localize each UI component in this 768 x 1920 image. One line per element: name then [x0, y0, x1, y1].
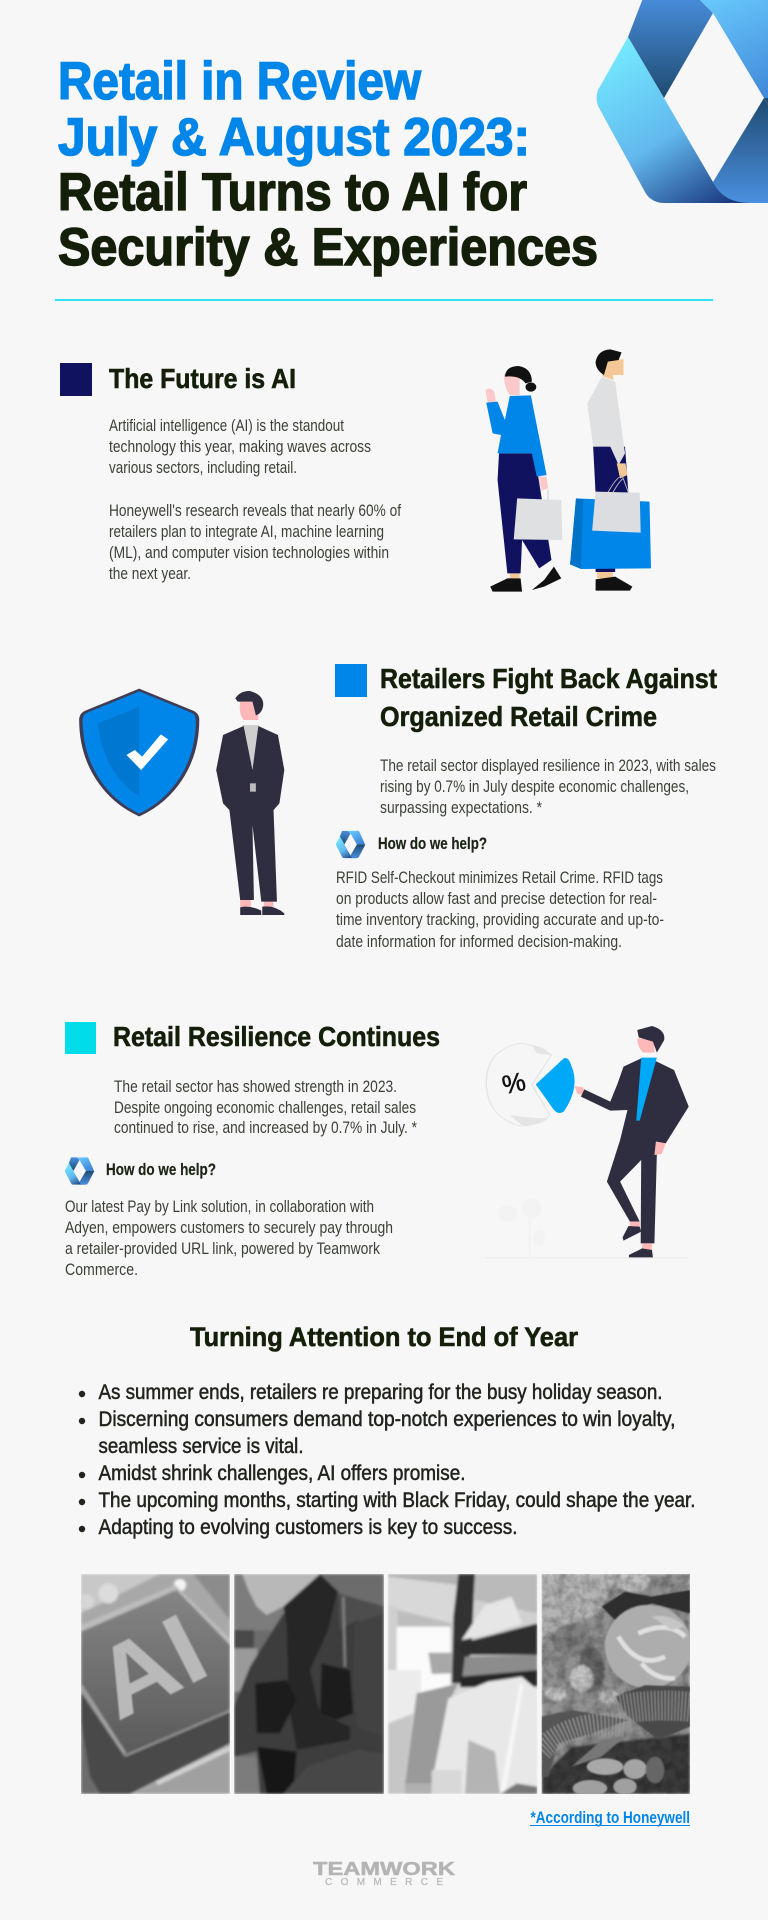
illustration: shield and man [81, 690, 284, 915]
text block: RFID: time inventory tracking, providing accurate and up-to- [336, 911, 664, 929]
heading: The Future is AI: The Future is AI [109, 363, 296, 394]
photo: AI chip [77, 1574, 230, 1794]
illustration: man with percent pie [485, 1026, 689, 1259]
panel: Retailers Fight Back [81, 663, 717, 951]
footer logo: Teamwork Commerce: TEAMWORK [313, 1858, 456, 1879]
subheading: how do we help: How do we help? [106, 1161, 216, 1179]
icon: navy square [60, 363, 92, 396]
text block: AI intro: (ML), and computer vision technologies within [109, 544, 389, 562]
text block: AI intro: technology this year, making waves across [109, 438, 371, 456]
text block: resilience: surpassing expectations. * [380, 799, 542, 817]
panel: Retail Resilience Continues [65, 1021, 689, 1279]
heading: Turning Attention: Turning Attention to End of Year [190, 1322, 578, 1352]
illustration: two shoppers [485, 349, 651, 592]
text block: resilience: rising by 0.7% in July despite economic challenges, [380, 778, 689, 796]
bullet list [79, 1381, 696, 1539]
text block: strength [114, 1078, 417, 1137]
bullet list: Discerning consumers demand top-notch experiences to win loyalty, [98, 1408, 676, 1431]
text block: resilience [380, 757, 716, 817]
title [58, 52, 598, 277]
icon: blue square [335, 664, 367, 697]
heading: Retail Resilience Continues: Retail Resilience Continues [113, 1021, 440, 1052]
text block: strength: The retail sector has showed strength in 2023. [114, 1078, 397, 1096]
logo: brand mark top right [596, 0, 768, 203]
bullet list: Amidst shrink challenges, AI offers promise. [98, 1462, 466, 1485]
photo strip [77, 1572, 692, 1797]
subheading: how do we help: How do we help? [378, 835, 487, 853]
panel: The Future is AI [60, 349, 651, 592]
title: Retail Turns to AI for [58, 163, 527, 222]
panel: Turning Attention to End of Year [79, 1322, 696, 1539]
icon: small brand mark [336, 831, 365, 858]
photo: christmas ornament [542, 1572, 692, 1797]
title: Security & Experiences [58, 218, 598, 277]
text block: pay by link: a retailer-provided URL link, powered by Teamwork [65, 1240, 381, 1258]
heading: Retailers Fight Back [380, 663, 717, 732]
text block: AI intro [109, 417, 401, 583]
text block: RFID: date information for informed decision-making. [336, 933, 622, 951]
heading: Retailers Fight Back: Retailers Fight Back Against [380, 663, 717, 694]
text block: strength: Despite ongoing economic challenges, retail sales [114, 1099, 416, 1117]
icon: cyan square [65, 1022, 96, 1054]
text block: AI intro: various sectors, including retail. [109, 459, 297, 477]
photo: clothing store [388, 1574, 537, 1794]
text block: AI intro: Honeywell's research reveals that nearly 60% of [109, 502, 401, 520]
text block: RFID: on products allow fast and precise detection for real- [336, 890, 657, 908]
text block: AI intro: retailers plan to integrate AI, machine learning [109, 523, 384, 541]
text block: AI intro: the next year. [109, 565, 191, 583]
bullet list: The upcoming months, starting with Black Friday, could shape the year. [98, 1489, 696, 1512]
title: July & August 2023: [58, 108, 530, 167]
text block: pay by link [65, 1198, 393, 1279]
footer logo: Teamwork Commerce: COMMERCE [325, 1877, 443, 1888]
citation link: *According to Honeywell [530, 1809, 690, 1827]
text block: pay by link: Commerce. [65, 1261, 138, 1279]
footer logo: Teamwork Commerce [313, 1858, 456, 1888]
text block: RFID: RFID Self-Checkout minimizes Retail Crime. RFID tags [336, 869, 663, 887]
texture noise [542, 1574, 690, 1794]
bullet list: As summer ends, retailers re preparing for the busy holiday season. [98, 1381, 662, 1404]
text block: strength: continued to rise, and increased by 0.7% in July. * [114, 1119, 417, 1137]
photo: security guard [234, 1574, 384, 1794]
icon: shield [81, 690, 198, 815]
text block: RFID [336, 869, 664, 951]
heading: Retailers Fight Back: Organized Retail Crime [380, 701, 657, 732]
icon: percent sign: % [499, 1066, 528, 1100]
title: Retail in Review [58, 52, 422, 111]
text block: AI intro: Artificial intelligence (AI) is the standout [109, 417, 344, 435]
icon: small brand mark [65, 1157, 94, 1185]
text block: pay by link: Our latest Pay by Link solution, in collaboration with [65, 1198, 374, 1216]
text block: pay by link: Adyen, empowers customers to securely pay through [65, 1219, 393, 1237]
bullet list: Adapting to evolving customers is key to success. [98, 1516, 518, 1539]
photo: AI chip: AI [77, 1593, 224, 1741]
bullet list: seamless service is vital. [98, 1435, 304, 1458]
